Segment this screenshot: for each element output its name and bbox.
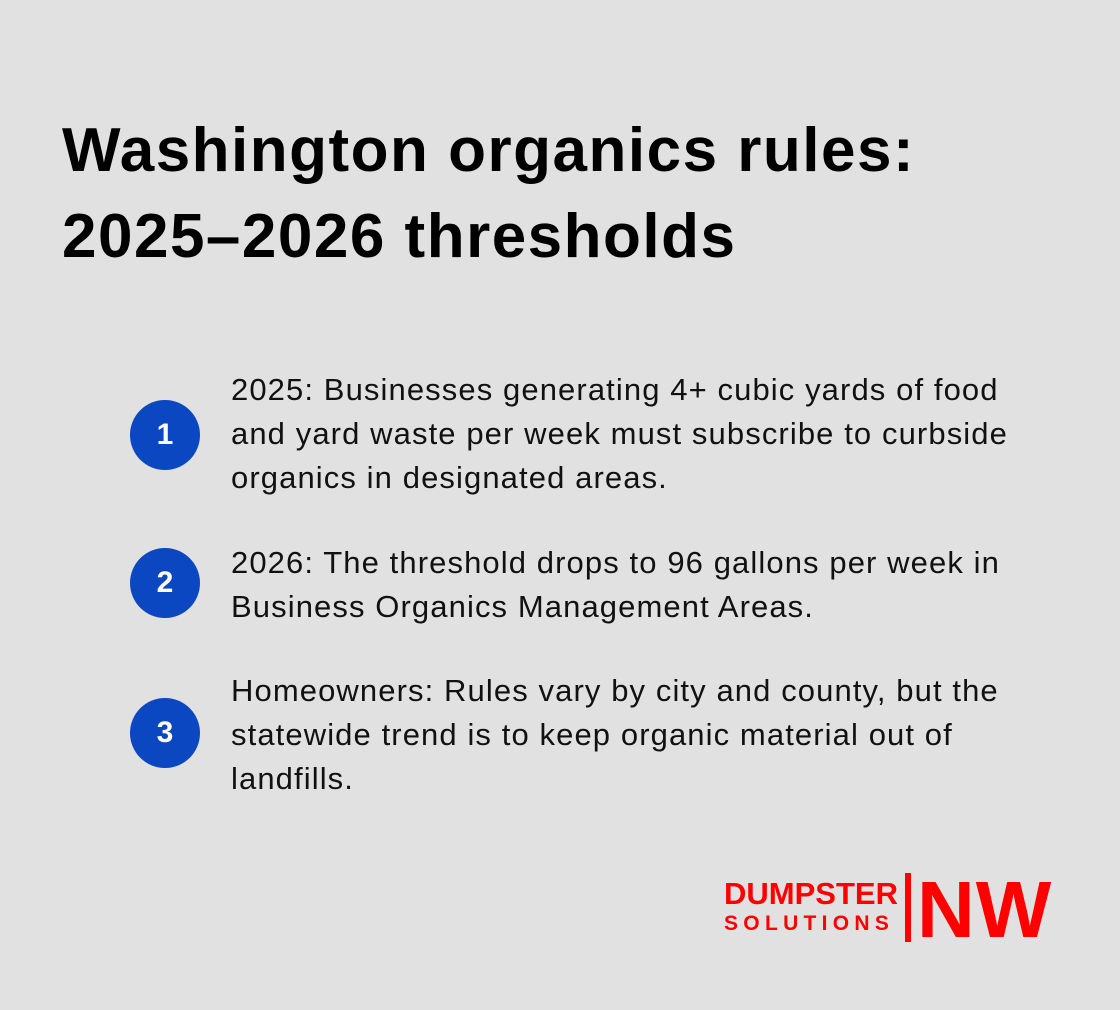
badge 3: 3	[157, 716, 173, 749]
logo: DUMPSTER	[724, 876, 898, 911]
title	[62, 116, 915, 271]
title: 2025–2026 thresholds	[62, 202, 736, 271]
text 2: 2026: The threshold drops to 96 gallons per week in	[231, 545, 1000, 580]
text 3: statewide trend is to keep organic material out of	[231, 717, 953, 752]
item 2	[130, 545, 1000, 624]
text 3: landfills.	[231, 761, 354, 796]
text 2	[231, 545, 1000, 624]
item 3	[130, 673, 999, 796]
text 2: Business Organics Management Areas.	[231, 589, 814, 624]
text 1	[231, 372, 1008, 495]
logo: NW	[917, 865, 1052, 954]
text 1: organics in designated areas.	[231, 460, 668, 495]
badge 2	[130, 548, 200, 618]
text 3: Homeowners: Rules vary by city and county, but the	[231, 673, 999, 708]
badge 3	[130, 698, 200, 768]
badge 2: 2	[157, 566, 173, 599]
item 1	[130, 372, 1008, 495]
logo: SOLUTIONS	[724, 912, 894, 935]
logo	[724, 865, 1052, 954]
text 1: and yard waste per week must subscribe to curbside	[231, 416, 1008, 451]
title: Washington organics rules:	[62, 116, 915, 185]
text 3	[231, 673, 999, 796]
badge 1	[130, 400, 200, 470]
text 1: 2025: Businesses generating 4+ cubic yards of food	[231, 372, 999, 407]
badge 1: 1	[157, 418, 173, 451]
